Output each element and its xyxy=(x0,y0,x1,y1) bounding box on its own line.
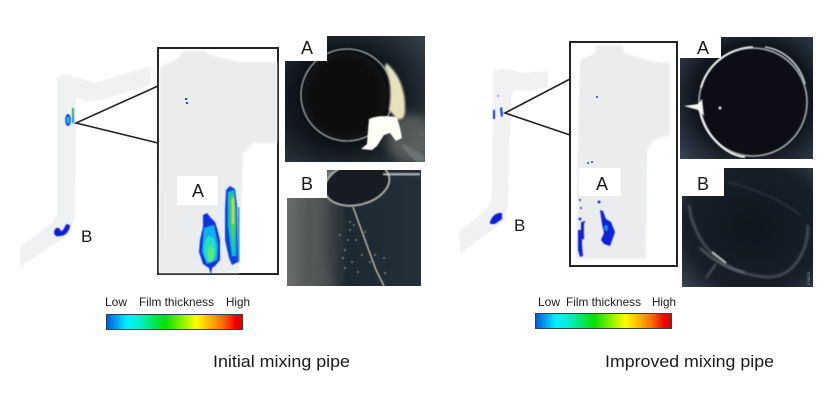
photo B improved xyxy=(682,168,813,287)
label A box: A xyxy=(192,181,204,201)
label A box improved photo: A xyxy=(697,38,709,58)
legend: initial: Low xyxy=(105,295,127,309)
caption: improved: Improved mixing pipe xyxy=(605,352,774,371)
film spot B xyxy=(490,213,502,224)
caption: initial: Initial mixing pipe xyxy=(213,352,350,371)
photo A initial xyxy=(285,36,434,162)
left connector lines xyxy=(76,86,158,143)
label B box initial photo: B xyxy=(301,174,313,194)
legend: improved: Film thickness xyxy=(566,295,641,309)
label A box improved photo xyxy=(679,36,721,58)
colour bar xyxy=(106,314,242,330)
label B box initial photo xyxy=(286,169,327,198)
film spot B xyxy=(54,224,70,236)
label A box: A xyxy=(596,174,608,194)
left overview pipe xyxy=(20,66,151,267)
label B box improved photo xyxy=(681,167,724,196)
legend: initial: Film thickness xyxy=(139,295,214,309)
label B right: B xyxy=(514,216,525,235)
film spot A xyxy=(65,108,74,126)
legend: improved xyxy=(536,295,676,328)
film spots A xyxy=(493,95,503,119)
small dots xyxy=(185,98,188,104)
right connector lines xyxy=(505,79,570,135)
film right cluster xyxy=(598,201,615,246)
photo A improved xyxy=(680,37,813,159)
legend: initial xyxy=(105,295,250,330)
film left edge xyxy=(578,199,585,257)
photo B initial xyxy=(287,170,421,286)
photo B improved: 076076 xyxy=(806,271,811,285)
label B left: B xyxy=(81,227,92,246)
label B box improved photo: B xyxy=(697,174,709,194)
label A box xyxy=(177,176,218,205)
left inset xyxy=(158,48,278,275)
label A box initial photo xyxy=(284,35,327,61)
film blob tall xyxy=(225,186,239,265)
label A box initial photo: A xyxy=(301,38,313,58)
label A box xyxy=(579,168,621,196)
film blob large xyxy=(199,213,220,275)
legend: improved: Low xyxy=(538,295,560,309)
small dots xyxy=(587,96,598,164)
colour bar xyxy=(536,314,672,328)
right overview pipe xyxy=(459,68,548,254)
legend: improved: High xyxy=(652,295,676,309)
legend: initial: High xyxy=(226,295,250,309)
right inset xyxy=(570,42,677,266)
